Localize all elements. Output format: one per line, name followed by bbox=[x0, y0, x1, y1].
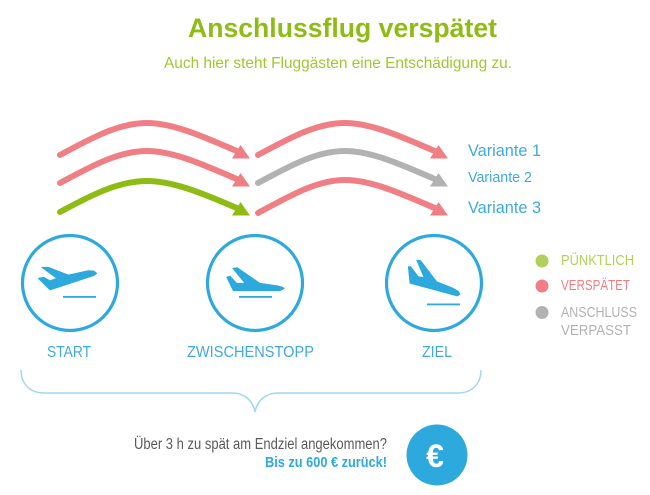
variant labels bbox=[468, 142, 541, 217]
callout question: Über 3 h zu spät am Endziel angekommen? bbox=[134, 435, 387, 453]
label: Variante 1: Variante 1 bbox=[468, 142, 541, 160]
arrow: variant 3 first leg on time bbox=[60, 181, 250, 216]
label: START: START bbox=[47, 344, 91, 361]
title: Anschlussflug verspätet bbox=[188, 13, 497, 43]
arrow: variant 1 first leg delayed bbox=[60, 123, 250, 158]
legend bbox=[536, 251, 637, 339]
arrows: first leg bbox=[60, 123, 448, 216]
callout amount: Bis zu 600 € zurück! bbox=[265, 455, 387, 471]
label: Variante 2: Variante 2 bbox=[468, 170, 532, 186]
brace bbox=[21, 370, 481, 412]
arrow: variant 2 second leg missed bbox=[258, 151, 448, 186]
label: ZIEL: ZIEL bbox=[422, 344, 452, 361]
arrow: variant 3 second leg delayed bbox=[258, 180, 448, 216]
legend item: connection missed: ANSCHLUSS bbox=[561, 305, 637, 321]
arrow: variant 2 first leg delayed bbox=[60, 151, 250, 186]
legend item: connection missed: VERPASST bbox=[561, 323, 631, 339]
icon: stopover, landing plane bbox=[208, 236, 302, 330]
icon: destination, descending plane bbox=[386, 236, 482, 330]
icon: euro badge bbox=[406, 424, 468, 486]
legend item: delayed: VERSPÄTET bbox=[561, 277, 630, 294]
icon: euro badge: € bbox=[426, 438, 444, 474]
legend item: connection missed bbox=[536, 305, 637, 339]
stop labels bbox=[47, 344, 452, 361]
subtitle: Auch hier steht Fluggästen eine Entschädigung zu. bbox=[164, 55, 512, 72]
icon: start, departing plane bbox=[22, 236, 118, 330]
legend item: on time: PÜNKTLICH bbox=[561, 251, 634, 269]
label: Variante 3: Variante 3 bbox=[468, 199, 541, 217]
arrow: variant 1 second leg delayed bbox=[258, 123, 448, 158]
label: ZWISCHENSTOPP: ZWISCHENSTOPP bbox=[187, 344, 314, 361]
